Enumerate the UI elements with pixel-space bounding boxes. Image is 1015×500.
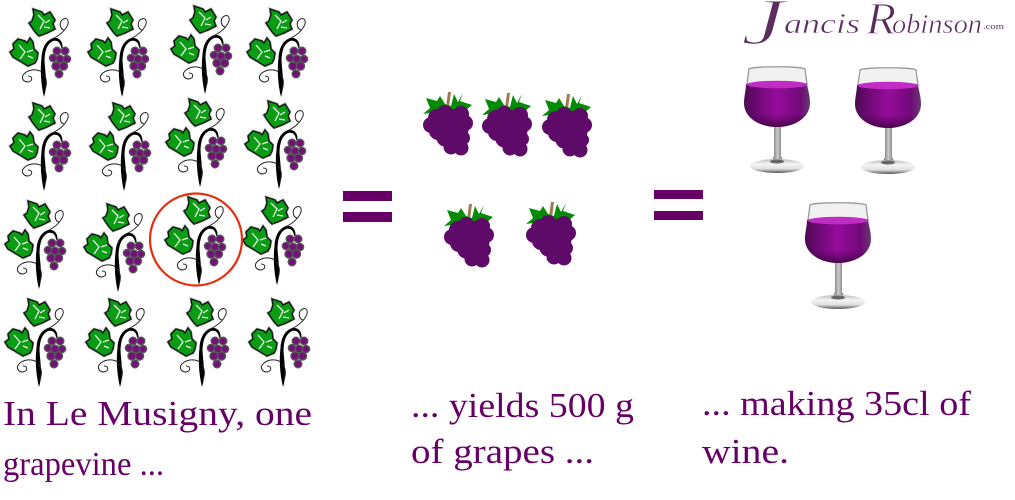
- vine row 2 column 3: [166, 99, 227, 187]
- vine row 2 column 2: [90, 103, 151, 191]
- logo: Jancis Robinson signature: [741, 0, 1004, 59]
- vine row 3 column 3, circled: [165, 197, 226, 285]
- caption: vine: [3, 394, 312, 483]
- vine row 1 column 3: [171, 6, 232, 94]
- caption: vine: grapevine ...: [3, 446, 164, 483]
- logo: Jancis Robinson signature: ancis: [784, 9, 860, 40]
- vine row 3 column 1: [5, 201, 66, 289]
- vine row 3 column 2: [84, 204, 145, 292]
- vine row 2 column 4: [245, 101, 306, 189]
- wine glass 3: [805, 203, 871, 309]
- caption: grapes: ... yields 500 g: [411, 386, 634, 425]
- grape bunch 1: [423, 92, 473, 156]
- wine glass 2: [855, 68, 921, 174]
- grapevine grid: [5, 6, 310, 387]
- equals sign 1: [343, 191, 392, 222]
- logo: Jancis Robinson signature: obinson: [892, 9, 982, 39]
- vine row 4 column 3: [168, 299, 229, 387]
- vine row 2 column 1: [10, 103, 71, 191]
- grape bunches: [423, 92, 592, 268]
- vine row 3 column 4: [243, 197, 304, 285]
- grape bunch 4: [444, 204, 494, 268]
- vine row 4 column 2: [86, 299, 147, 387]
- wine glasses: [744, 67, 921, 309]
- vine row 4 column 1: [5, 299, 66, 387]
- caption: wine: ... making 35cl of: [702, 384, 971, 423]
- caption: grapes: [411, 386, 634, 471]
- logo: Jancis Robinson signature: .com: [983, 21, 1004, 31]
- grape bunch 3: [542, 94, 592, 158]
- wine glass 1: [744, 67, 810, 173]
- vine row 4 column 4: [249, 299, 310, 387]
- caption: wine: wine.: [702, 432, 789, 471]
- caption: vine: In Le Musigny, one: [3, 394, 312, 433]
- vine row 1 column 2: [88, 9, 149, 97]
- equals sign 2: [654, 190, 703, 220]
- red highlight circle: [150, 194, 242, 286]
- caption: grapes: of grapes ...: [411, 432, 594, 471]
- vine row 1 column 4: [247, 9, 308, 97]
- grape bunch 2: [482, 93, 532, 156]
- caption: wine: [702, 384, 971, 471]
- grape bunch 5: [526, 202, 576, 266]
- vine row 1 column 1: [10, 9, 71, 97]
